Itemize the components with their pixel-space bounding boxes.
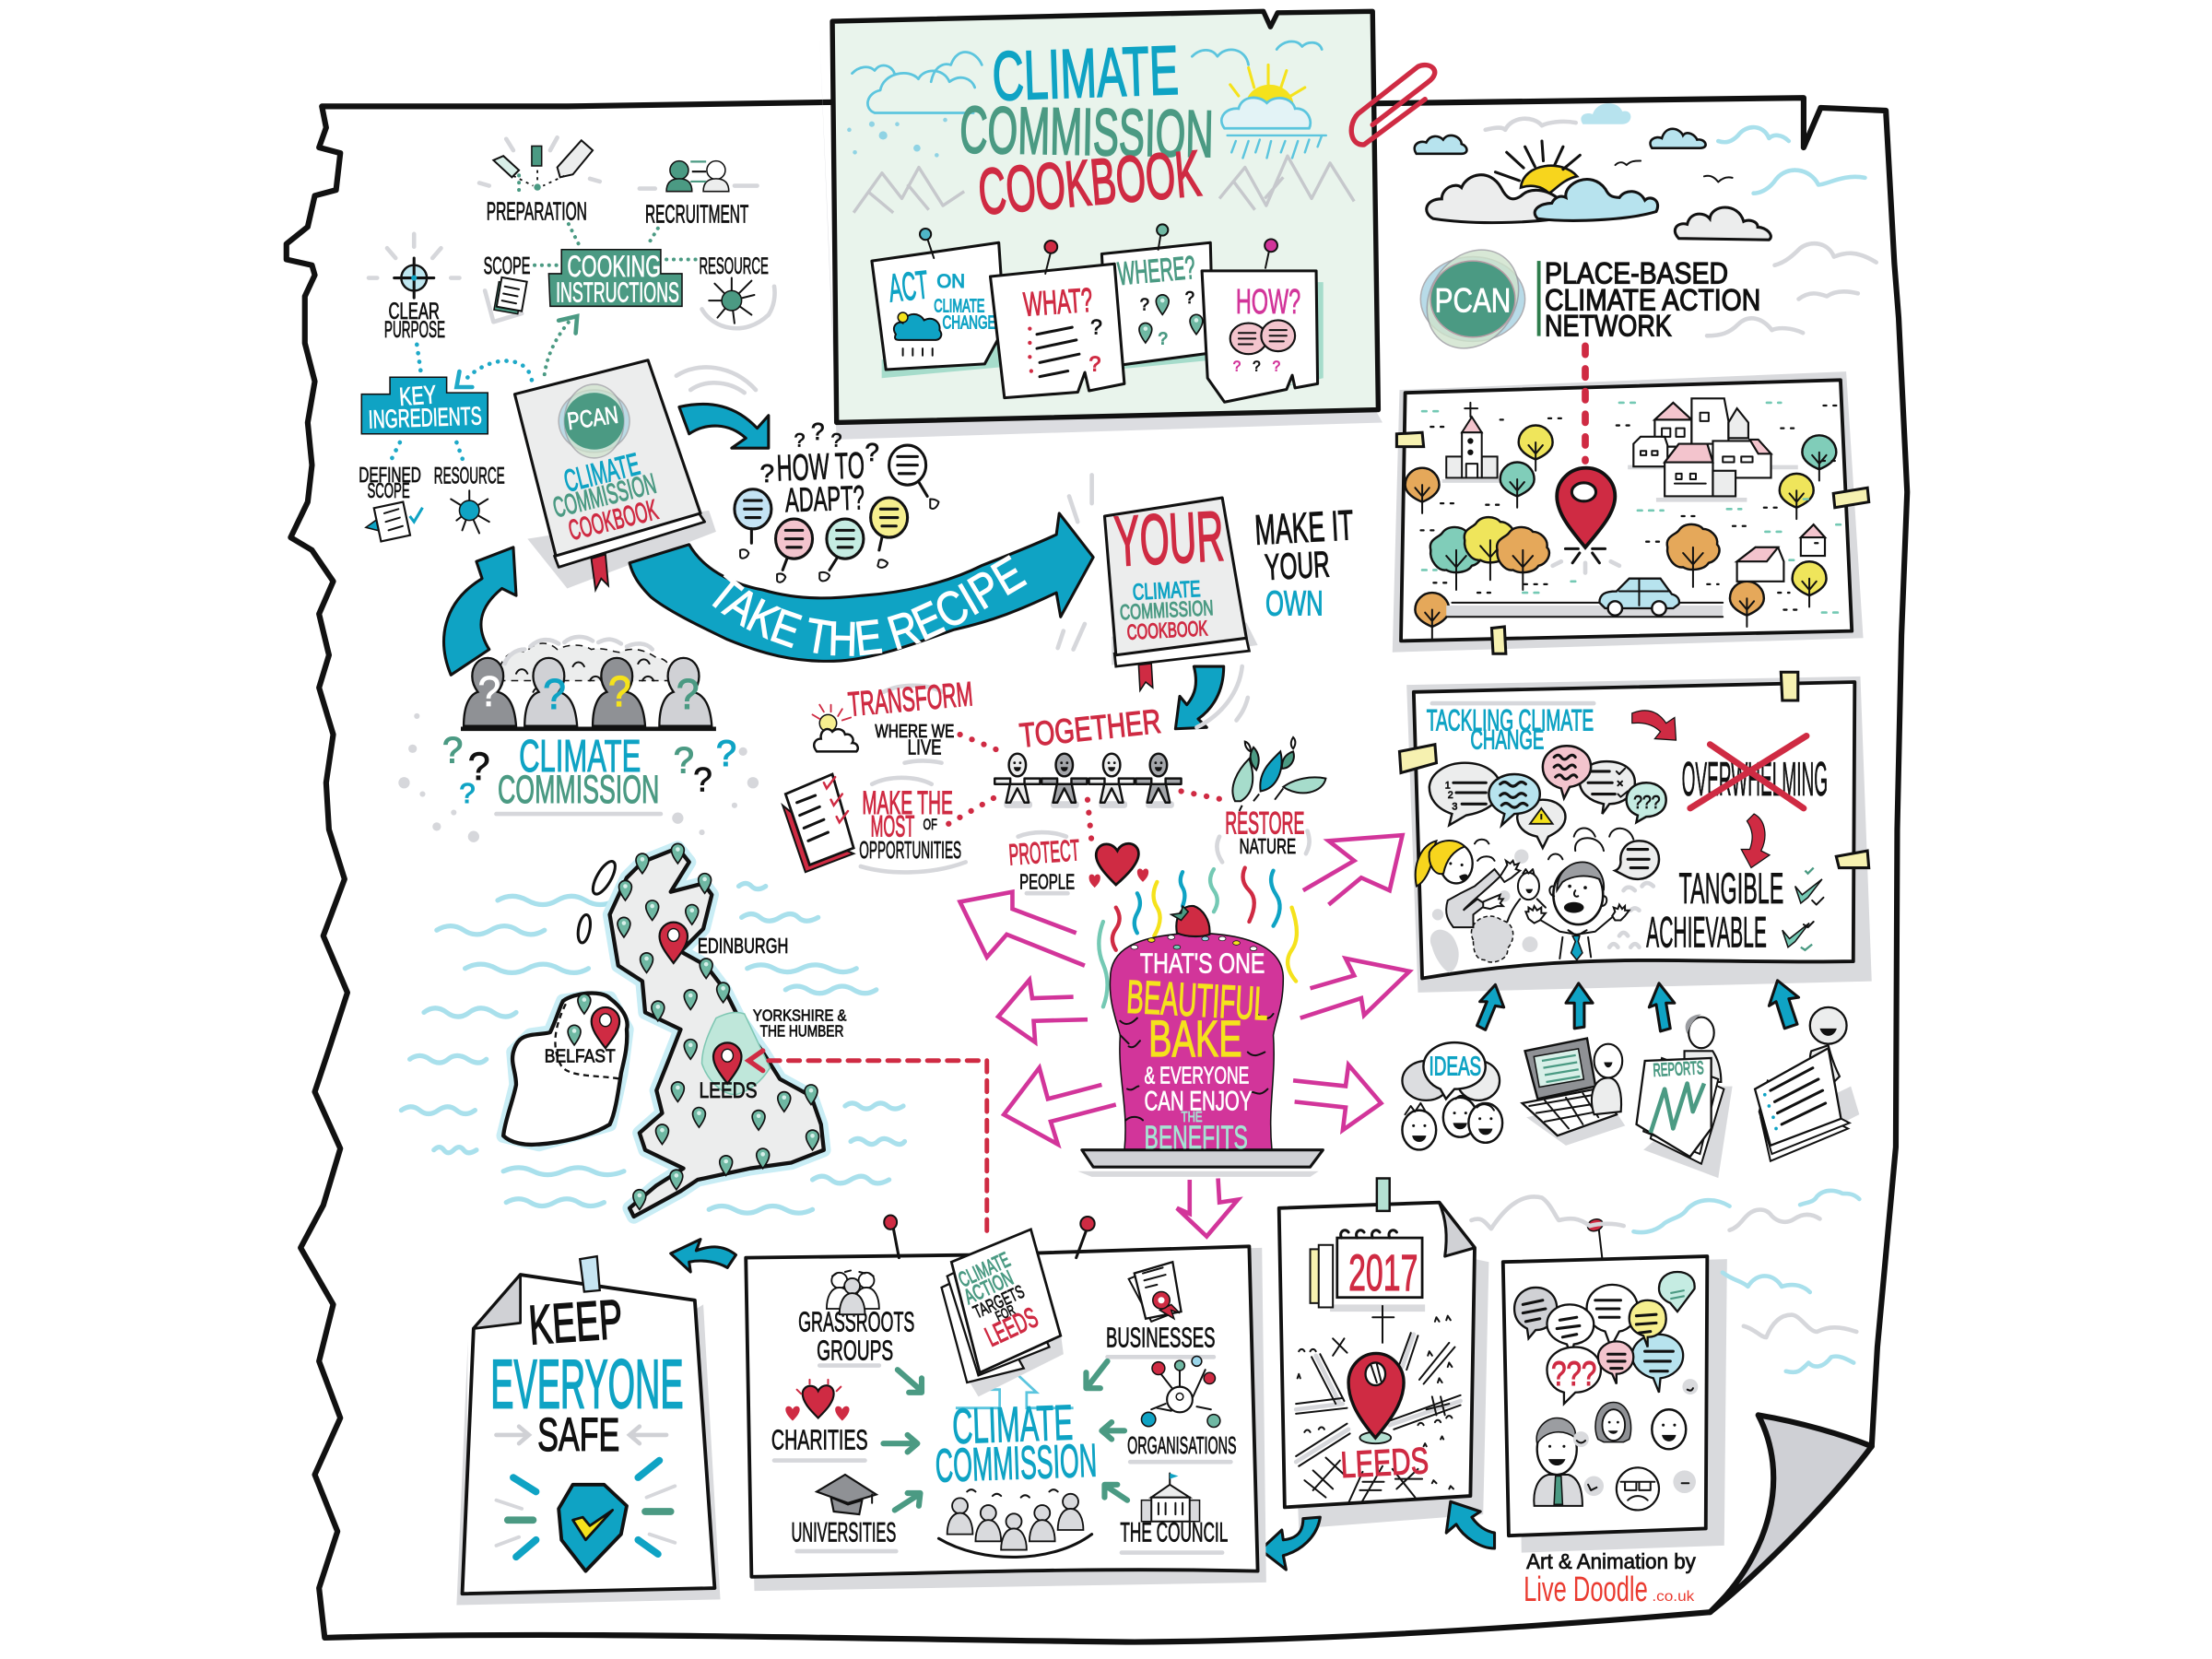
title text: [959, 31, 1214, 229]
sun behind clouds: [1521, 166, 1577, 194]
dashed arrow to key ingredients: [456, 361, 532, 387]
note: act on climate change: CLIMATE: [934, 296, 984, 316]
your cookbook: [1104, 497, 1258, 690]
Leeds label: LEEDS: [1340, 1441, 1430, 1486]
cover text: [549, 447, 661, 547]
Ireland: [503, 994, 628, 1145]
how to adapt: ?: [865, 438, 879, 466]
blue arrow to safe panel: [671, 1240, 735, 1272]
Great Britain: [610, 848, 824, 1217]
question marks on heads: ?: [608, 667, 631, 715]
title text: COOKBOOK: [975, 136, 1204, 229]
credit: [1524, 1549, 1696, 1609]
map: UK and Ireland: [503, 843, 847, 1217]
icing drips: [1120, 1014, 1274, 1120]
targets document: LEEDS: [981, 1300, 1042, 1353]
icon: preparation tools: [479, 137, 600, 191]
note: how: ?: [1253, 359, 1261, 375]
place labels: [545, 934, 847, 1103]
words: EVERYONE: [490, 1346, 684, 1423]
cooking instructions box: COOKING: [567, 250, 661, 283]
snow dots: [847, 118, 947, 158]
weather: sun, cloud and rain: [1221, 65, 1326, 158]
icon: ideas group: IDEAS: [1430, 1052, 1481, 1081]
note: act on climate change: CHANGE: [942, 313, 996, 334]
icon: certificate: [1129, 1262, 1182, 1322]
bubbles cluster: ???: [1551, 1355, 1596, 1393]
transform where we live: TRANSFORM: [847, 675, 974, 724]
icon: church: [1442, 403, 1501, 483]
icon: scope papers: [485, 277, 527, 322]
icon: hearts: [785, 1380, 850, 1421]
plate: [1077, 1150, 1323, 1177]
transform where we live: WHERE WE: [875, 722, 954, 742]
make the most of opportunities: [782, 774, 966, 872]
cake text: & EVERYONE: [1145, 1061, 1249, 1088]
targets document: CLIMATE: [955, 1247, 1014, 1291]
how to adapt: ?: [811, 418, 825, 445]
magenta outline arrows: [960, 835, 1409, 1237]
note: what: ?: [1089, 352, 1100, 376]
commission name: [496, 731, 661, 814]
red dotted connector right: [1182, 791, 1224, 800]
PCAN network name: [1545, 257, 1760, 342]
cookbook main: [514, 360, 716, 590]
together chain: TOGETHER: [1018, 702, 1163, 755]
labels with underlines: GRASSROOTS: [798, 1306, 914, 1338]
note: act on climate change: ON: [936, 270, 965, 292]
question marks on heads: ?: [677, 670, 699, 718]
map pin: [1553, 468, 1619, 573]
question marks on heads: ?: [543, 670, 566, 718]
ingredient and instruction labels: CLEAR: [389, 300, 440, 324]
red dotted connector left: [948, 795, 998, 824]
green arrows: [883, 1361, 1127, 1510]
note: what: ?: [1090, 315, 1102, 339]
scattered question marks: [442, 731, 736, 809]
make it your own: MAKE IT: [1253, 500, 1355, 554]
make the most of opportunities: MOST: [871, 810, 914, 843]
words: SAFE: [537, 1408, 619, 1461]
central title: CLIMATE: [951, 1395, 1074, 1454]
tangible achievable: [1646, 865, 1823, 958]
note: where: ?: [1140, 295, 1149, 314]
credit: .co.uk: [1652, 1589, 1695, 1605]
cake text: BENEFITS: [1145, 1120, 1248, 1156]
panel: tackling climate change: [1399, 672, 1872, 993]
divider bar: [1537, 261, 1541, 336]
speech bubbles: 1: [1445, 780, 1451, 791]
dashed arrow from partners to Leeds: [748, 1051, 987, 1230]
note: how: ?: [1233, 359, 1241, 375]
cake text: [1125, 947, 1270, 1156]
note: where: [1101, 224, 1216, 370]
PCAN logo on cover: [559, 384, 629, 458]
note: what: [990, 241, 1124, 398]
scattered question marks: ?: [716, 734, 736, 774]
title text: COMMISSION: [959, 93, 1214, 171]
motion strokes: [1196, 666, 1248, 727]
strawberry: [1171, 906, 1209, 936]
tape pieces: [1396, 432, 1869, 653]
panel: people and questions: [1503, 1218, 1727, 1553]
blue arrows between bottom panels: [1261, 1501, 1495, 1570]
tangible achievable: ACHIEVABLE: [1646, 909, 1767, 958]
bookmark ribbon: [592, 555, 608, 590]
big arrow: take the recipe: TAKE THE RECIPE: [712, 555, 1027, 656]
rays: [496, 1461, 675, 1557]
place labels: YORKSHIRE &: [753, 1006, 847, 1025]
ingredient and instruction labels: [359, 196, 769, 502]
road: [1446, 603, 1723, 617]
tapes: [1399, 672, 1869, 868]
clouds left: [852, 41, 1322, 112]
figure: man with tie: [1525, 862, 1630, 960]
bubbles cluster: [1514, 1272, 1695, 1404]
place labels: THE HUMBER: [760, 1022, 843, 1041]
ingredient and instruction labels: SCOPE: [367, 478, 410, 502]
PCAN logo on cover: PCAN: [566, 401, 620, 435]
protect people: PEOPLE: [1019, 870, 1075, 894]
labels with underlines: BUSINESSES: [1106, 1322, 1215, 1354]
scattered question marks: ?: [468, 745, 490, 789]
note: how: HOW?: [1236, 282, 1300, 322]
scattered question marks: ?: [442, 731, 463, 771]
icon: clear purpose target: [369, 234, 459, 298]
how to adapt: [760, 418, 879, 519]
icon: ideas group: [1402, 1042, 1502, 1149]
big arrow: take the recipe: [629, 512, 1095, 663]
icon: car: [1599, 579, 1679, 616]
dashed line from network to pin: [1583, 346, 1587, 461]
your cookbook: COMMISSION: [1119, 595, 1214, 624]
bottom right sky clouds: [1471, 1191, 1859, 1372]
how to adapt: ADAPT?: [784, 478, 865, 519]
person silhouettes: [461, 658, 716, 729]
how to adapt: HOW TO: [776, 445, 865, 489]
calendar 2017: 2017: [1348, 1244, 1418, 1301]
figure: small child: [1507, 869, 1546, 922]
panel: keep everyone safe: [456, 1256, 721, 1606]
central title: COMMISSION: [935, 1434, 1098, 1492]
restore nature: RESTORE: [1225, 806, 1304, 841]
sky illustrations top right: [1415, 103, 1877, 335]
how to adapt: ?: [831, 429, 842, 452]
place labels: LEEDS: [699, 1078, 758, 1103]
labels with underlines: UNIVERSITIES: [791, 1518, 896, 1547]
cake text: CAN ENJOY: [1145, 1088, 1252, 1117]
speech bubbles: ???: [1633, 793, 1661, 813]
icon: shield: [559, 1485, 627, 1571]
heading: [1427, 703, 1594, 755]
cooking instructions box: INSTRUCTIONS: [556, 276, 679, 309]
panel: cookbook title sheet: [819, 11, 1382, 440]
ingredient and instruction labels: RESOURCE: [699, 254, 769, 279]
folded corner: [474, 1275, 521, 1329]
icon: council building: [1141, 1473, 1200, 1522]
cooking instructions box: [548, 250, 682, 309]
targets document: TARGETS: [971, 1282, 1028, 1323]
commission name: COMMISSION: [498, 768, 659, 812]
labels with underlines: ORGANISATIONS: [1127, 1431, 1237, 1459]
blue cloud: [1535, 180, 1658, 220]
blue arrows into tackling panel: [1477, 981, 1799, 1031]
infographic canvas: OVERWHELMING: [1682, 753, 1828, 806]
faces: [1534, 1379, 1698, 1510]
crowd faces: [1430, 828, 1653, 972]
icon: resource hub top: [702, 278, 775, 328]
birds: [1616, 160, 1733, 182]
paper sheet outline: [287, 98, 1907, 1642]
arrow: your book to together: [1175, 666, 1224, 729]
protect people: PROTECT: [1007, 833, 1081, 871]
cake text: BAKE: [1148, 1010, 1242, 1067]
make it your own: OWN: [1265, 583, 1324, 623]
make it your own: YOUR: [1264, 544, 1331, 588]
connector dots: [519, 173, 698, 265]
icon: town houses: [1628, 398, 1798, 502]
restore nature: NATURE: [1240, 834, 1296, 858]
make it your own: [1253, 500, 1355, 623]
up arrow outline: [956, 1372, 1074, 1408]
grass tufts: [1422, 403, 1848, 613]
calendar 2017: [1311, 1230, 1425, 1312]
cake text: THAT'S ONE: [1140, 947, 1265, 979]
cover text: COOKBOOK: [565, 493, 661, 547]
icon: defined scope checklist: [366, 502, 422, 541]
icon: leaves: [1232, 737, 1325, 811]
icon: reports with presenter: [1637, 1015, 1733, 1178]
cake: [1077, 906, 1323, 1177]
icon: grassroots group: [827, 1270, 879, 1314]
big pin: [1348, 1353, 1404, 1443]
figure: woman: [1416, 841, 1520, 927]
protect people: [1007, 832, 1081, 894]
restore nature: [1217, 806, 1310, 862]
red dotted connector down: [1088, 800, 1092, 843]
heading: TACKLING CLIMATE: [1427, 703, 1594, 736]
labels with underlines: [771, 1306, 1237, 1553]
PCAN logo: [1408, 232, 1537, 366]
note: how: [1202, 239, 1324, 402]
map glow: [503, 848, 824, 1217]
tangible achievable: TANGIBLE: [1679, 865, 1783, 913]
red curved arrows: [1632, 711, 1770, 868]
icon: stacked document with person: [1755, 1007, 1859, 1161]
speech bubbles: [1430, 746, 1666, 879]
motion strokes around your book: [1058, 475, 1092, 650]
key ingredients box: [361, 377, 488, 434]
PCAN network name: CLIMATE ACTION: [1545, 284, 1760, 317]
place labels: EDINBURGH: [698, 934, 788, 958]
credit: Art & Animation by: [1526, 1549, 1696, 1573]
central crowd: [938, 1489, 1092, 1557]
words: [490, 1288, 684, 1461]
central title: [935, 1395, 1098, 1492]
speech bubbles: 2: [1448, 790, 1453, 801]
PCAN network name: PLACE-BASED: [1545, 257, 1728, 290]
labels with underlines: GROUPS: [817, 1334, 893, 1366]
place labels: BELFAST: [545, 1046, 616, 1066]
trees: [1406, 426, 1836, 638]
labels with underlines: CHARITIES: [771, 1423, 868, 1455]
grey cloud right: [1675, 207, 1771, 240]
climate commission crowd: [398, 637, 759, 842]
cake text: BEAUTIFUL: [1125, 971, 1270, 1030]
hearts: [1089, 843, 1148, 888]
note: act on climate change: ACT: [887, 263, 930, 311]
page curl corner: [1710, 1415, 1872, 1612]
PCAN network name: NETWORK: [1545, 309, 1672, 342]
icon: recruitment people: [640, 161, 758, 192]
overwhelming crossed out: [1682, 735, 1828, 808]
mountains: [853, 156, 1354, 213]
ingredient and instruction labels: PURPOSE: [384, 318, 445, 343]
title text: CLIMATE: [991, 31, 1180, 115]
how to adapt: ?: [794, 429, 806, 452]
heading: CHANGE: [1470, 725, 1544, 755]
transform where we live: [813, 675, 974, 763]
note: what: WHAT?: [1022, 281, 1094, 324]
icon: reports with presenter: REPORTS: [1653, 1058, 1704, 1081]
note: act on climate change: [872, 229, 1005, 378]
map lines: [1296, 1306, 1461, 1503]
your cookbook: YOUR: [1112, 497, 1226, 582]
cover text: CLIMATE: [560, 447, 643, 500]
ingredient and instruction labels: DEFINED: [359, 463, 421, 487]
panel: Leeds 2017: [1279, 1178, 1488, 1528]
cake text: THE: [1182, 1110, 1203, 1125]
icon: graduation cap: [817, 1475, 877, 1514]
motion strokes above book: [677, 367, 756, 393]
red pins: [592, 923, 741, 1084]
panel: local map: [1393, 371, 1869, 653]
thought balloons: [735, 445, 938, 582]
transform where we live: LIVE: [908, 735, 942, 759]
ingredient and instruction labels: RECRUITMENT: [645, 200, 748, 229]
cover text: COMMISSION: [549, 467, 659, 524]
words: KEEP: [527, 1288, 625, 1356]
make the most of opportunities: OPPORTUNITIES: [859, 836, 961, 864]
arrow: crowd to book: [444, 547, 516, 675]
white cloud: [1427, 175, 1577, 223]
islands: [576, 858, 619, 944]
note: where: ?: [1185, 288, 1194, 307]
question marks on heads: [477, 667, 699, 718]
small houses: [1737, 524, 1825, 582]
ingredient and instruction labels: SCOPE: [484, 252, 530, 279]
scattered question marks: ?: [693, 760, 712, 798]
targets document: ACTION: [960, 1265, 1017, 1309]
tape: [580, 1256, 600, 1292]
together chain: [994, 702, 1182, 808]
note: where: WHERE?: [1116, 250, 1196, 292]
how to adapt: ?: [760, 459, 774, 488]
targets document: [942, 1230, 1064, 1396]
note: where: ?: [1159, 328, 1168, 347]
PCAN logo: PCAN: [1435, 281, 1511, 319]
key ingredients box: INGREDIENTS: [368, 401, 482, 434]
scattered question marks: ?: [674, 740, 694, 781]
credit: Live Doodle: [1524, 1570, 1648, 1609]
ingredient and instruction labels: PREPARATION: [487, 196, 587, 225]
ingredient and instruction labels: RESOURCE: [434, 465, 505, 489]
connector dots blue: [390, 345, 464, 463]
teal pins: [568, 843, 818, 1209]
heat squiggles above cake: [1099, 868, 1297, 1006]
Yorkshire region: [702, 1012, 770, 1095]
sprinkles: [1131, 935, 1257, 951]
corner curl: [1440, 1203, 1475, 1256]
commission name: CLIMATE: [519, 731, 641, 782]
panel: community of partners: [746, 1215, 1266, 1591]
scattered dots: [398, 713, 759, 842]
speech bubbles: 3: [1452, 801, 1457, 812]
water waves: [401, 883, 905, 1213]
icon: organisations network: [1141, 1357, 1220, 1427]
icon: resource hub small: [451, 490, 489, 533]
your cookbook: CLIMATE: [1132, 577, 1201, 606]
question marks on heads: ?: [477, 667, 500, 715]
tape: [1377, 1178, 1390, 1211]
red dotted connectors: [960, 735, 1001, 751]
icon: laptop: [1523, 1039, 1625, 1146]
pins: [884, 1215, 1095, 1258]
labels with underlines: THE COUNCIL: [1120, 1518, 1228, 1547]
icon: paper clip: [1351, 65, 1435, 145]
make the most of opportunities: MAKE THE: [862, 785, 953, 821]
scattered question marks: ?: [459, 777, 476, 809]
dashed arrow to cooking instructions: [545, 316, 577, 374]
your cookbook: COOKBOOK: [1126, 616, 1208, 644]
arrow: book to how to adapt: [679, 404, 769, 448]
targets document: FOR: [994, 1302, 1018, 1324]
key ingredients box: KEY: [398, 380, 437, 411]
make the most of opportunities: OF: [924, 816, 937, 833]
note: how: ?: [1273, 359, 1280, 375]
